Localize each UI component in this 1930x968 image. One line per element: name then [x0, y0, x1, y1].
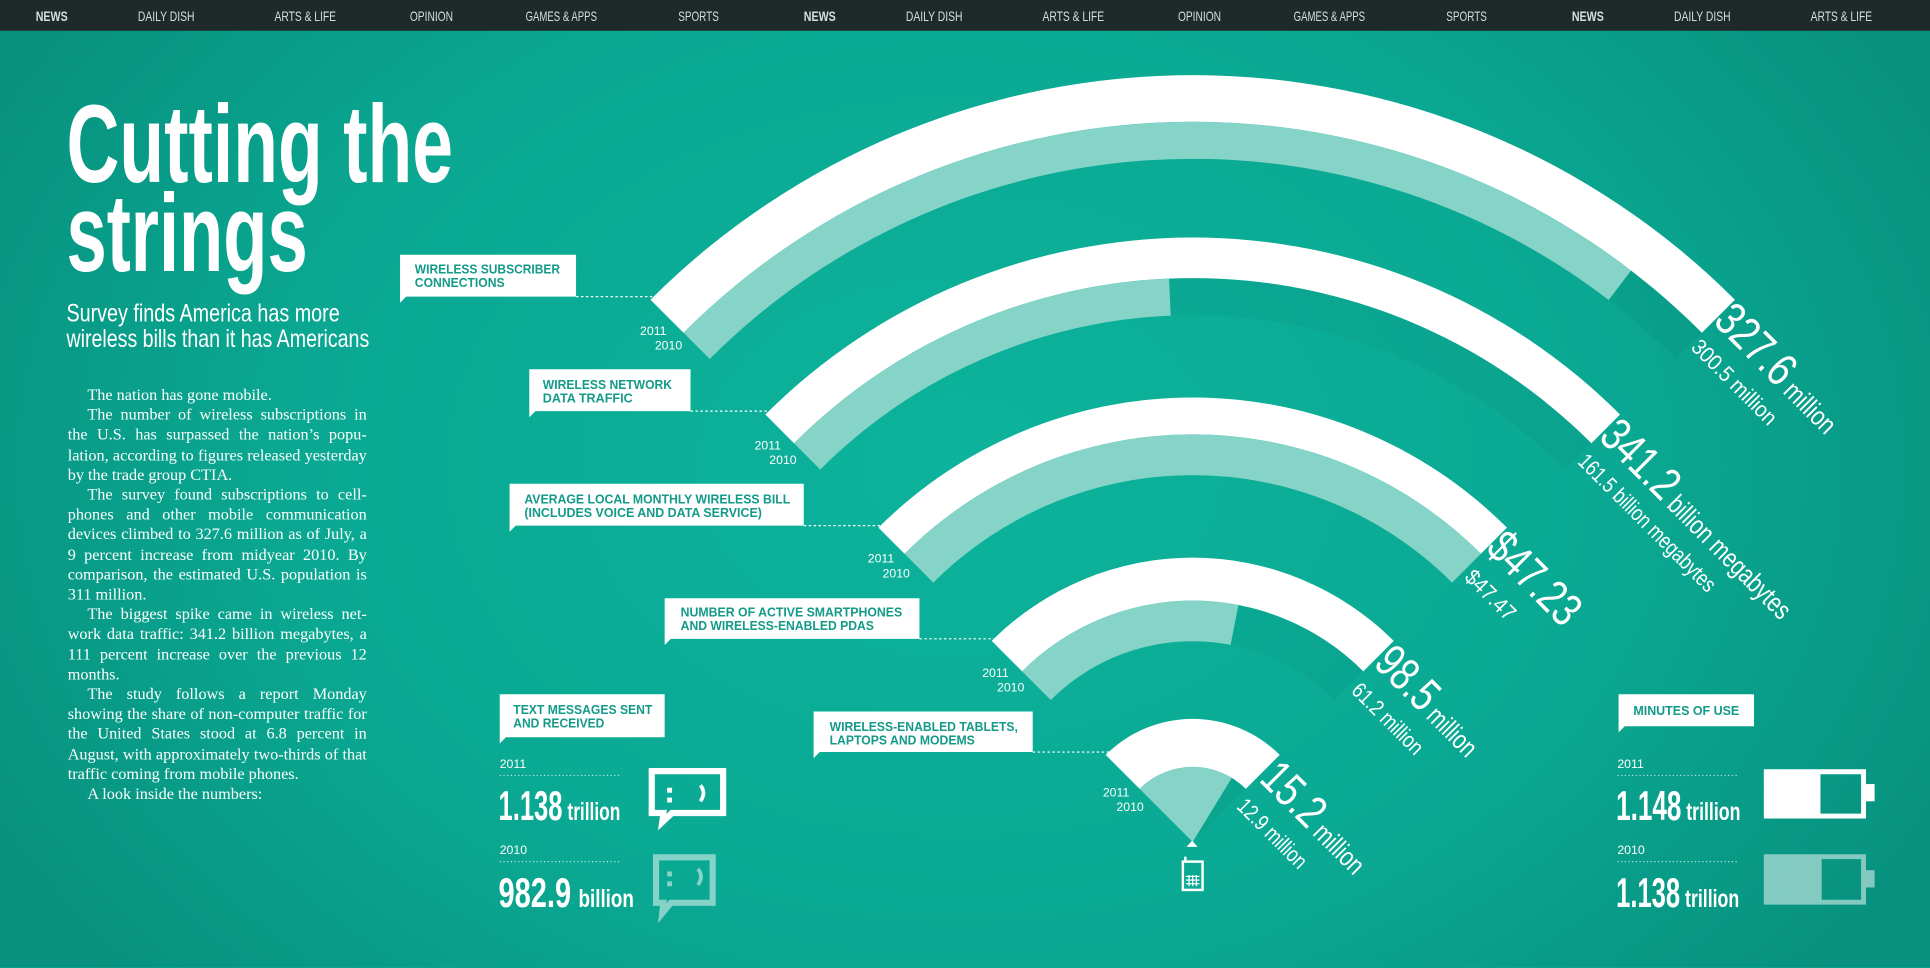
label: smartphones: NUMBER OF ACTIVE SMARTPHONES: [681, 605, 903, 620]
panel: text messages: billion: [579, 886, 634, 913]
label: wireless subscriber connections: WIRELESS SUBSCRIBER: [415, 261, 561, 276]
subtitle: Survey finds America has more: [66, 300, 340, 327]
label: network data traffic: DATA TRAFFIC: [543, 390, 633, 405]
label: network data traffic: [529, 369, 797, 467]
nav bar: ARTS & LIFE: [1811, 8, 1872, 24]
title: [66, 83, 453, 295]
label: wireless subscriber connections: [400, 255, 682, 353]
panel: text messages: AND RECEIVED: [513, 715, 604, 730]
label: monthly bill: [510, 484, 910, 580]
label: tablets: WIRELESS-ENABLED TABLETS,: [830, 719, 1018, 734]
panel: minutes of use: MINUTES OF USE: [1633, 703, 1740, 718]
panel: text messages: 2010: [500, 843, 527, 857]
nav bar: NEWS: [36, 8, 68, 24]
panel: minutes of use: trillion: [1685, 886, 1739, 913]
label: smartphones: 2010: [997, 681, 1025, 695]
label: tablets: 2010: [1116, 800, 1144, 814]
icon: phone: [1183, 841, 1203, 890]
ring 1: wireless subscriber connections: 300.5 million: [1686, 334, 1782, 430]
ring 3: monthly bill: [878, 397, 1592, 636]
ring 4: smartphones: 61.2 million: [1347, 678, 1429, 760]
ring 3: monthly bill: $47.23: [1477, 520, 1592, 636]
body text: A look inside the numbers:: [87, 784, 262, 803]
title: Cutting the: [66, 83, 453, 206]
ring 4: smartphones: [992, 558, 1496, 766]
panel: text messages: trillion: [567, 799, 620, 826]
nav bar: NEWS: [804, 8, 836, 24]
label: tablets: [814, 711, 1144, 814]
body text: The study follows a report Monday showing the share of non-computer traffic for the United States stood at 6.8 percent in August, with approximately two-thirds of that traffic coming from mobile phones.: [68, 684, 367, 783]
nav bar: NEWS: [1572, 8, 1604, 24]
panel: minutes of use: trillion: [1686, 799, 1740, 826]
nav bar: OPINION: [1178, 8, 1221, 24]
nav bar: [0, 0, 1930, 31]
icon: speech bubble 2010: [656, 857, 713, 913]
panel: minutes of use: 1.148: [1616, 782, 1681, 829]
label: monthly bill: (INCLUDES VOICE AND DATA SERVICE): [524, 505, 762, 520]
nav bar: SPORTS: [1446, 8, 1487, 24]
panel: text messages: 1.138: [499, 782, 563, 829]
label: smartphones: [665, 598, 1025, 695]
label: wireless subscriber connections: 2011: [640, 324, 667, 338]
panel: text messages: [499, 694, 723, 916]
label: wireless subscriber connections: 2010: [655, 339, 682, 353]
ring 5: tablets: [1106, 719, 1383, 883]
label: monthly bill: AVERAGE LOCAL MONTHLY WIRELESS BILL: [524, 491, 790, 506]
ring 2: data traffic: 341.2 billion megabytes: [1591, 408, 1810, 628]
panel: minutes of use: 2010: [1617, 843, 1645, 857]
body text: [68, 385, 367, 803]
label: tablets: 2011: [1103, 785, 1129, 799]
subtitle: wireless bills than it has Americans: [66, 326, 369, 353]
label: network data traffic: WIRELESS NETWORK: [543, 377, 673, 392]
label: network data traffic: 2010: [769, 453, 797, 467]
ring 2: data traffic: 161.5 billion megabytes: [1573, 449, 1721, 597]
nav bar: ARTS & LIFE: [274, 8, 336, 24]
ring 1: wireless subscriber connections: 327.6 million: [1705, 293, 1855, 443]
nav bar: DAILY DISH: [1674, 8, 1731, 24]
label: smartphones: AND WIRELESS-ENABLED PDAS: [681, 618, 874, 633]
label: wireless subscriber connections: CONNECTIONS: [415, 275, 505, 290]
icon: battery 2010: [1764, 854, 1875, 905]
icon: speech bubble 2011: [652, 771, 723, 822]
nav bar: DAILY DISH: [906, 8, 963, 24]
panel: text messages: TEXT MESSAGES SENT: [513, 702, 652, 717]
label: monthly bill: 2010: [883, 566, 910, 580]
label: tablets: LAPTOPS AND MODEMS: [830, 733, 975, 748]
nav bar: GAMES & APPS: [526, 8, 597, 24]
body text: The biggest spike came in wireless net­work data traffic: 341.2 billion megabytes, a 111 percent increase over the previous 12 months.: [68, 605, 367, 683]
icon: battery 2011: [1764, 769, 1875, 819]
label: network data traffic: 2011: [755, 438, 781, 452]
label: smartphones: 2011: [982, 666, 1009, 680]
panel: minutes of use: [1616, 694, 1875, 916]
panel: minutes of use: 1.138: [1616, 869, 1680, 916]
panel: text messages: 2011: [500, 757, 526, 771]
ring 3: monthly bill: $47.47: [1460, 564, 1521, 626]
nav bar: GAMES & APPS: [1294, 8, 1365, 24]
ring 2: data traffic: [765, 238, 1810, 628]
ring 5: tablets: 15.2 million: [1251, 751, 1383, 883]
ring 5: tablets: 12.9 million: [1232, 793, 1313, 874]
body text: The nation has gone mobile.: [87, 385, 272, 404]
nav bar: DAILY DISH: [138, 8, 194, 24]
nav bar: SPORTS: [678, 8, 719, 24]
title: strings: [66, 172, 308, 295]
panel: minutes of use: 2011: [1617, 757, 1644, 771]
nav bar: OPINION: [410, 8, 453, 24]
subtitle: [66, 300, 369, 353]
ring 4: smartphones: 98.5 million: [1365, 635, 1496, 766]
body text: The survey found subscriptions to cell­phones and other mobile communication devices climbed to 327.6 million as of July, a 9 percent increase from midyear 2010. By comparison, the estimated U.S. population is 311 million.: [68, 485, 367, 603]
nav bar: ARTS & LIFE: [1043, 8, 1104, 24]
label: monthly bill: 2011: [868, 552, 894, 566]
panel: text messages: 982.9: [499, 869, 571, 916]
body text: The number of wireless subscriptions in the U.S. has surpassed the nation’s popu­lation, according to figures released yester­day by the trade group CTIA.: [68, 405, 367, 483]
ring 1: wireless subscriber connections: [651, 75, 1855, 443]
